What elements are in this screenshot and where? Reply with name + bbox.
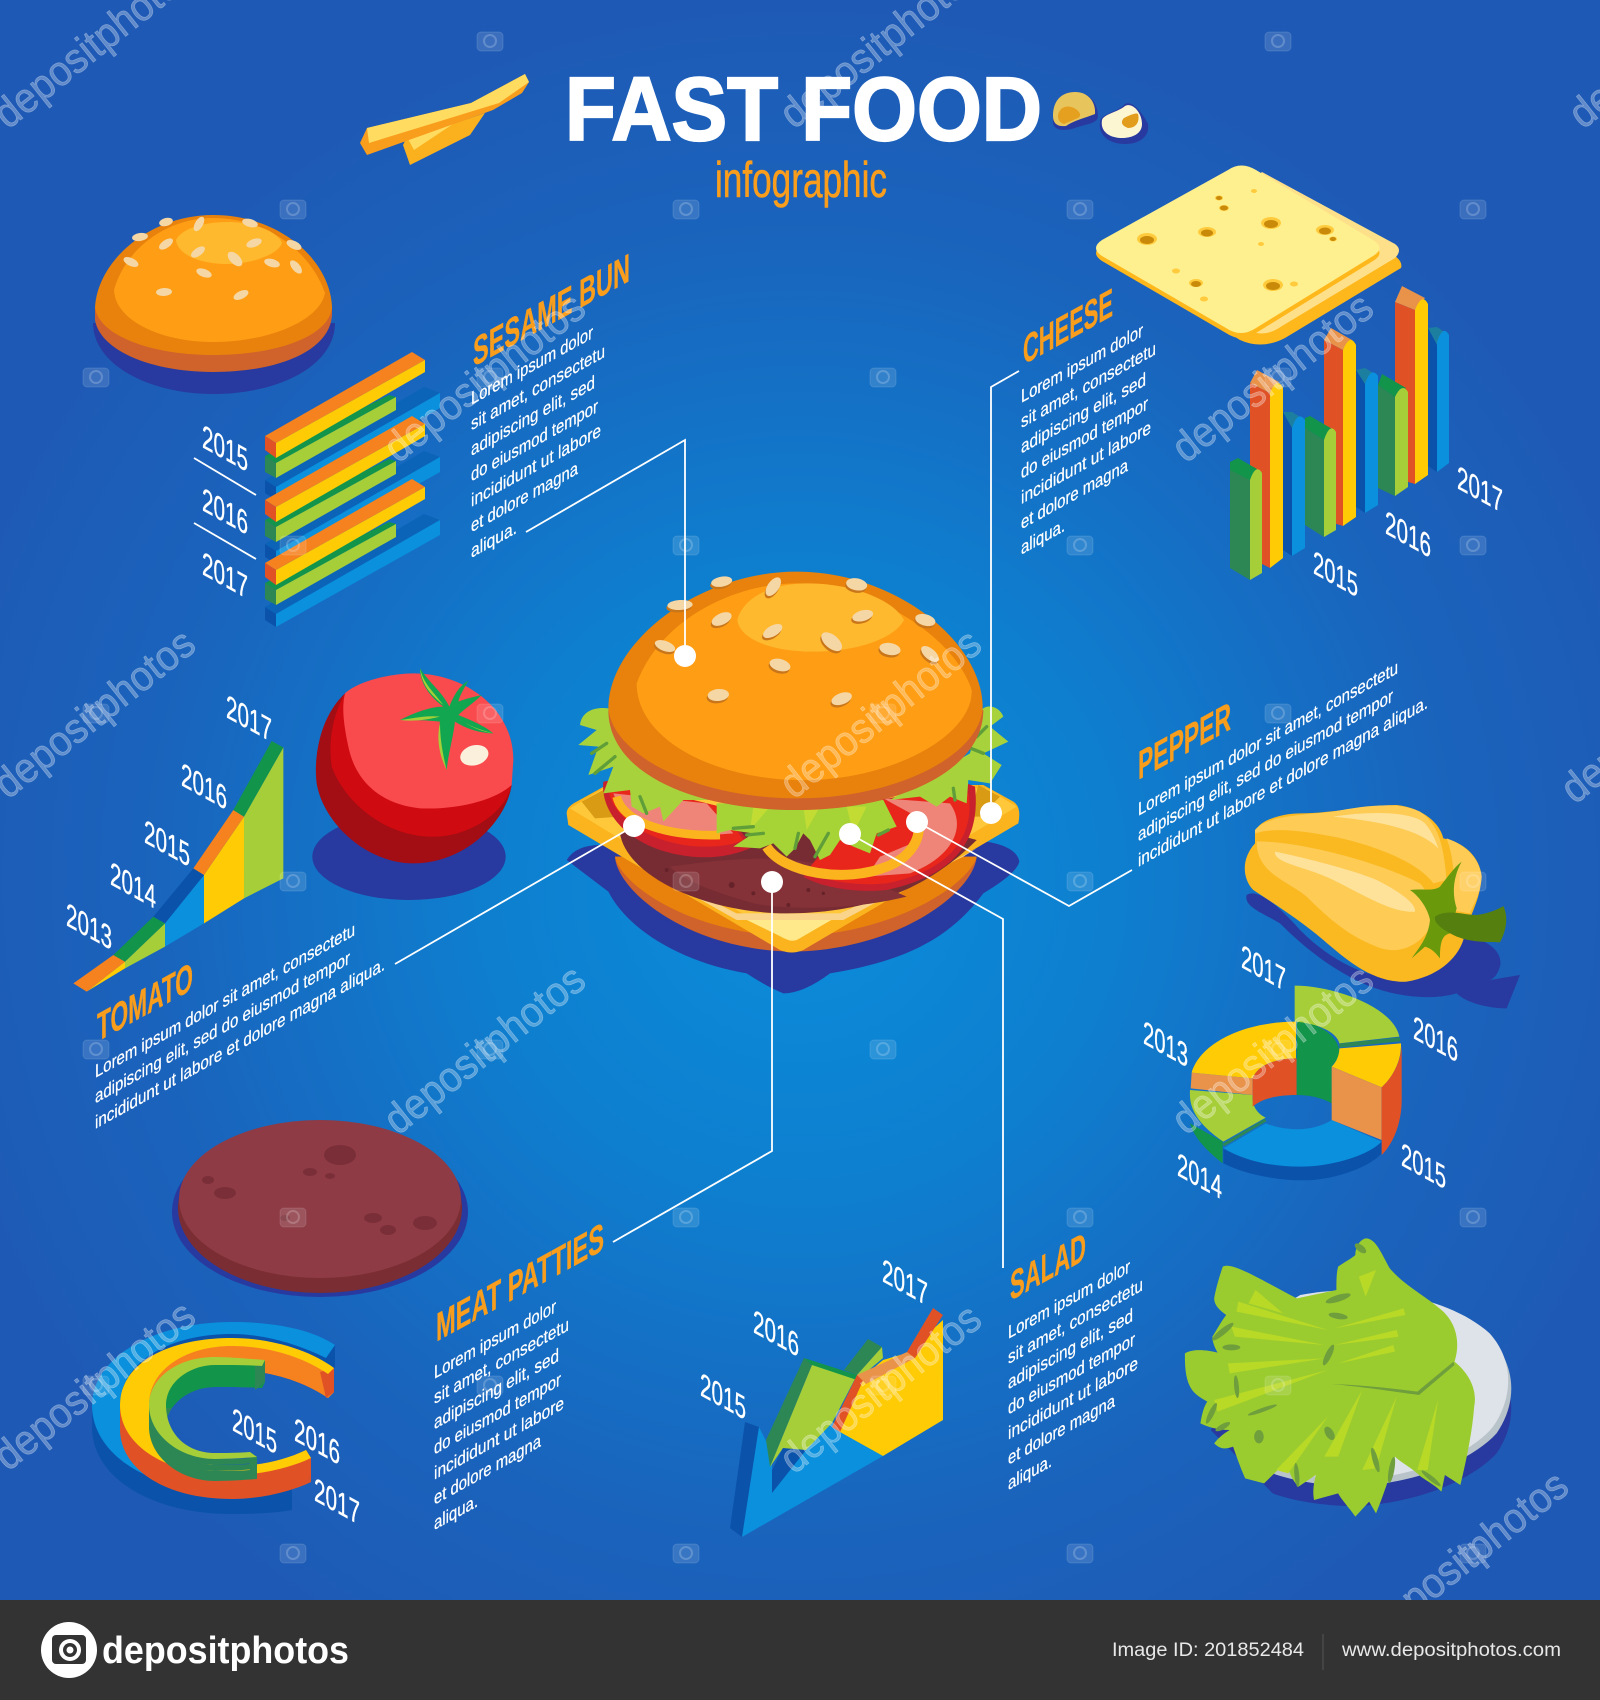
text: pepper: PEPPER [1138, 693, 1231, 789]
watermarks: depositphotos [374, 955, 594, 1143]
text: tomato: adipiscing elit, sed do eiusmod tempor [95, 947, 350, 1108]
area chart: tomato: 2013 [66, 895, 112, 958]
watermarks: depositphotos [1162, 283, 1382, 471]
area chart: tomato: 2016 [181, 755, 227, 818]
area chart: salad: 2015 [700, 1365, 746, 1428]
area chart: tomato: 2017 [226, 687, 272, 750]
donut arc chart: meat patties: 2017 [314, 1470, 360, 1533]
bar chart: cheese: 2016 [1385, 503, 1431, 566]
panel: salad [700, 1192, 1511, 1537]
text: meat patties: et dolore magna [434, 1430, 542, 1510]
bar chart: sesame bun: 2015 [202, 417, 248, 480]
text: cheese [1021, 256, 1156, 559]
burger illustration [567, 572, 1019, 993]
text: meat patties: incididunt ut labore [434, 1392, 564, 1484]
panel: meat patties [92, 1120, 604, 1535]
panel: cheese [1021, 166, 1503, 605]
sesame seeds [652, 575, 942, 710]
icon: tomato [312, 668, 513, 900]
text: cheese: et dolore magna [1021, 454, 1129, 534]
text: sesame bun: adipiscing elit, sed [471, 372, 595, 461]
text: salad: SALAD [1010, 1224, 1086, 1310]
heading: fast food: FAST FOOD [565, 60, 1042, 160]
icon: french fries [360, 74, 529, 165]
icon: lettuce on plate [1185, 1238, 1511, 1517]
text: sesame bun [471, 245, 630, 563]
bottom bun [615, 857, 977, 952]
donut chart: pepper: 2015 [1401, 1135, 1446, 1197]
tomato slices [603, 780, 753, 857]
watermarks: depositphotos [770, 1294, 990, 1482]
watermarks: depositphotos [1357, 1461, 1577, 1649]
text: tomato: Lorem ipsum dolor sit amet, consectetu [95, 919, 355, 1083]
lettuce [578, 708, 713, 822]
watermarks: depositphotos [770, 619, 990, 807]
watermark camera icons [83, 32, 1486, 1563]
text: pepper: incididunt ut labore et dolore magna aliqua. [1138, 692, 1428, 872]
icon: meat patty [172, 1120, 468, 1297]
icon: sesame bun [93, 215, 335, 394]
watermarks: depositphotos [1162, 955, 1382, 1143]
text: sesame bun: incididunt ut labore [471, 420, 601, 512]
text: pepper: Lorem ipsum dolor sit amet, consectetu [1138, 657, 1398, 821]
footer logo text: depositphotos [102, 1630, 349, 1672]
text: salad: sit amet, consectetu [1008, 1274, 1143, 1369]
bar chart: sesame bun: 2016 [202, 480, 248, 543]
area chart: tomato: 2015 [144, 812, 190, 875]
text: tomato: incididunt ut labore et dolore magna aliqua. [95, 954, 385, 1134]
panel: sesame bun [93, 215, 630, 627]
bar chart: cheese [1230, 286, 1503, 605]
image id: Image ID: 201852484 [1112, 1640, 1304, 1661]
text: salad: aliqua. [1008, 1450, 1052, 1495]
text: pepper [1138, 585, 1428, 872]
text: sesame bun: sit amet, consectetu [471, 341, 605, 435]
text: cheese: sit amet, consectetu [1021, 338, 1156, 433]
leader lines [395, 371, 1132, 1268]
text: cheese: Lorem ipsum dolor [1021, 320, 1143, 408]
donut chart: pepper [1143, 937, 1458, 1207]
donut chart: pepper: 2016 [1413, 1008, 1458, 1070]
text: meat patties: MEAT PATTIES [436, 1214, 604, 1351]
text: cheese: incididunt ut labore [1021, 417, 1151, 509]
text: pepper: adipiscing elit, sed do eiusmod tempor [1138, 685, 1393, 846]
text: sesame bun: aliqua. [471, 517, 517, 563]
footer bar [0, 1600, 1600, 1700]
text: meat patties [434, 1214, 604, 1535]
donut chart: pepper: 2014 [1177, 1145, 1222, 1207]
text: sesame bun: do eiusmod tempor [471, 396, 598, 486]
title [565, 60, 1042, 208]
ring: green [149, 1357, 265, 1481]
donut arc chart: meat patties [92, 1322, 360, 1533]
area chart: tomato: 2014 [110, 854, 156, 917]
text: salad: do eiusmod tempor [1008, 1329, 1135, 1419]
text: salad: Lorem ipsum dolor [1008, 1256, 1130, 1344]
text: tomato [95, 848, 385, 1134]
text: cheese: aliqua. [1021, 515, 1065, 559]
text: salad: et dolore magna [1008, 1390, 1116, 1470]
icon: sauce drops [1053, 92, 1148, 144]
text: sesame bun: Lorem ipsum dolor [471, 322, 593, 410]
text: meat patties: sit amet, consectetu [434, 1314, 569, 1409]
subheading: infographic [715, 152, 887, 208]
ring: yellow and orange [120, 1338, 334, 1499]
patty [620, 807, 977, 913]
text: meat patties: aliqua. [434, 1490, 478, 1535]
text: sesame bun: et dolore magna [471, 457, 579, 537]
bar chart: cheese: 2015 [1313, 543, 1358, 605]
text: salad [1008, 1192, 1143, 1495]
bar chart: cheese: 2017 [1457, 458, 1503, 521]
top bun [608, 710, 983, 810]
donut chart: pepper: 2013 [1143, 1013, 1188, 1075]
donut chart: pepper: 2017 [1241, 937, 1286, 999]
area chart: salad [700, 1251, 943, 1537]
text: salad: adipiscing elit, sed [1008, 1305, 1133, 1394]
panel: tomato [66, 668, 513, 1134]
icon: cheese slices [1096, 166, 1401, 345]
callout dots [623, 645, 1002, 893]
cheese slice [567, 785, 1019, 952]
text: meat patties: do eiusmod tempor [434, 1369, 561, 1459]
burger shadow [567, 842, 1019, 993]
text: cheese: CHEESE [1023, 280, 1113, 374]
donut arc chart: meat patties: 2015 [232, 1400, 277, 1462]
pepper rings [617, 797, 720, 835]
area chart: tomato [66, 687, 283, 992]
text: sesame bun: SESAME BUN [473, 245, 630, 376]
icon: yellow pepper [1245, 805, 1520, 1008]
text: cheese: adipiscing elit, sed [1021, 369, 1146, 458]
area chart: salad: 2017 [882, 1251, 928, 1314]
text: cheese: do eiusmod tempor [1021, 393, 1148, 484]
area chart: salad: 2016 [753, 1302, 799, 1365]
panel: pepper [1138, 585, 1520, 1207]
text: salad: incididunt ut labore [1008, 1352, 1138, 1444]
donut arc chart: meat patties: 2016 [294, 1410, 340, 1473]
footer logo icon [41, 1622, 97, 1678]
website: www.depositphotos.com [1341, 1640, 1561, 1661]
bar chart: sesame bun: 2017 [202, 544, 248, 607]
text: meat patties: Lorem ipsum dolor [434, 1296, 556, 1384]
text: meat patties: adipiscing elit, sed [434, 1345, 559, 1434]
text: tomato: TOMATO [97, 954, 193, 1051]
bar chart: sesame bun [194, 352, 440, 627]
watermarks: depositphotos [374, 283, 594, 471]
ring: blue [92, 1322, 335, 1514]
